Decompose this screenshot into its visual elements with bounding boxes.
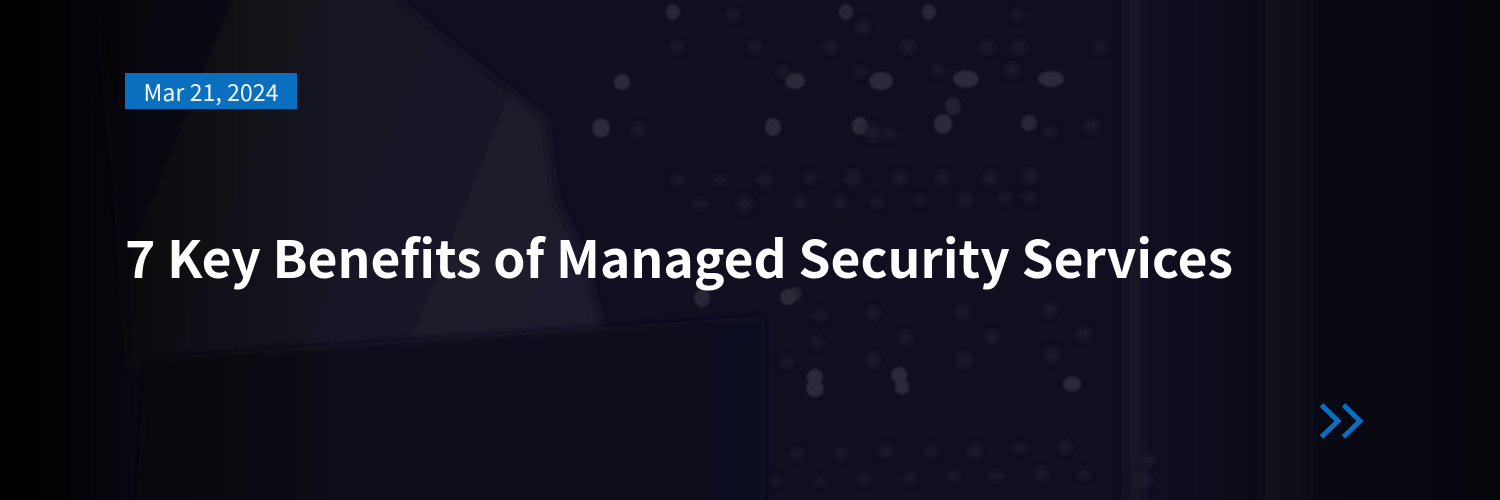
title: 7 Key Benefits of Managed Security Services (125, 218, 1233, 293)
icon: double chevron arrow (1320, 403, 1364, 439)
bright bokeh dots (592, 4, 1081, 397)
person silhouette (90, 0, 606, 370)
date badge: Mar 21, 2024 (144, 74, 278, 108)
laptop (135, 316, 765, 500)
rack post (1126, 0, 1144, 500)
faint server lights (632, 9, 1155, 489)
